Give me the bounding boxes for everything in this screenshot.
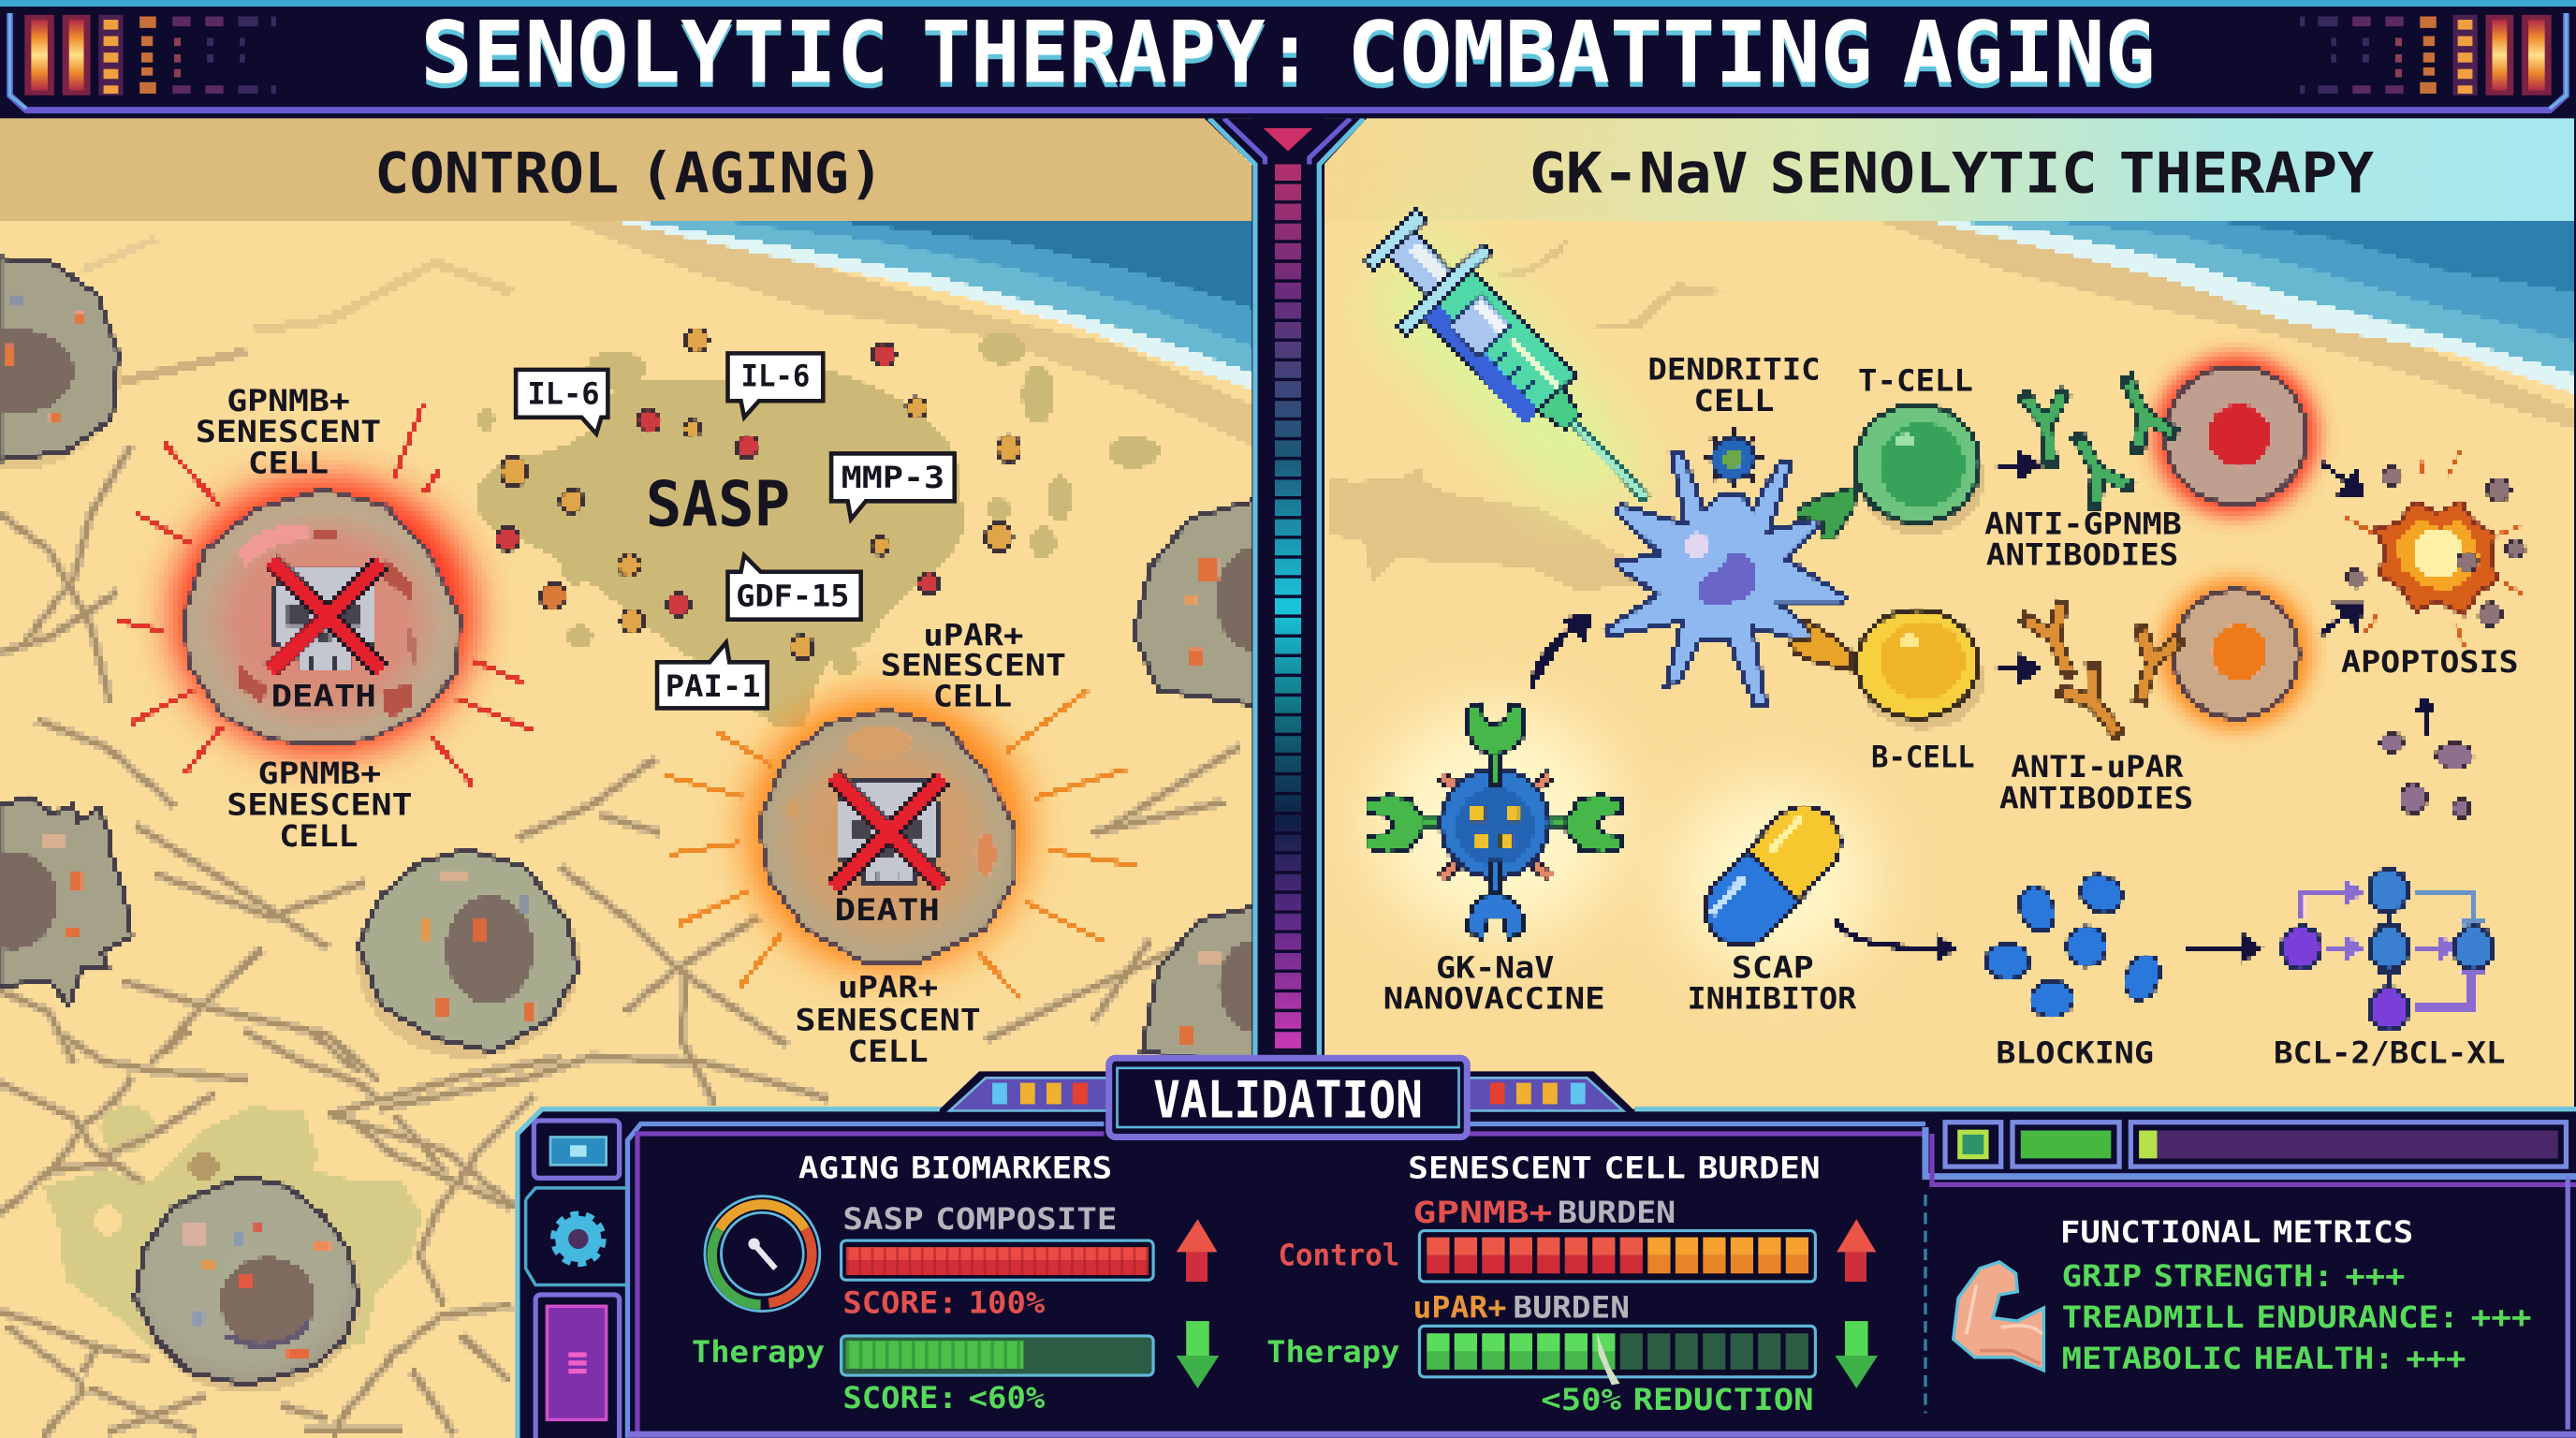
sidebar widget: purple slot [535,1295,620,1438]
value: score 100%: SCORE: 100% [842,1286,1045,1320]
ocean [567,222,1265,452]
icon: flexed arm [1954,1262,2043,1371]
heading: functional metrics: FUNCTIONAL METRICS [2060,1216,2413,1250]
callout: GDF-15 [728,555,861,620]
icon: pink triangle marker [1264,128,1312,151]
label: anti-uPAR antibodies: ANTI-uPAR [2011,751,2185,785]
icon: GK-NaV nanovaccine [1367,703,1623,942]
label: T-cell: T-CELL [1858,365,1973,399]
callout: MMP-3 [831,453,955,520]
label: BCL-2/BCL-XL: BCL-2/BCL-XL [2274,1037,2506,1071]
validation tab: VALIDATION [1153,1070,1423,1129]
panel: GK-NaV senolytic therapy [1314,115,2576,1134]
label: blocking: BLOCKING [1996,1037,2154,1071]
icon: arrow down green [1177,1321,1219,1388]
label: dendritic cell [1647,353,1821,418]
label: uPAR+ burden: uPAR+ [1412,1292,1506,1326]
label: lower uPAR+ senescent cell: uPAR+ [838,971,938,1005]
background cell: lower left [135,1177,361,1393]
background cell: lower right [1142,903,1284,1068]
spine gradient bar [1275,161,1301,1051]
label: top uPAR+ senescent cell [881,620,1066,714]
sand background [0,115,1265,1438]
label: top uPAR+ senescent cell: uPAR+ [923,620,1023,653]
title: THERAPY: [922,3,1314,103]
control scene artwork [0,115,1298,1438]
callout: PAI-1 [657,642,768,708]
label: GPNMB+ burden [1412,1196,1676,1230]
dashboard frame [518,1109,2576,1438]
label: death GPNMB: DEATH [271,681,376,714]
label: top GPNMB+ senescent cell: CELL [248,447,329,480]
arrow: orange cell to apoptosis [2320,605,2363,636]
arrow: nanovaccine to dendritic cell [1531,616,1590,690]
panel: validation dashboard [518,1058,2576,1438]
tab: right indicator lights [1462,1071,1633,1121]
heading: therapy: GK-NaV SENOLYTIC THERAPY [1530,141,2374,206]
senescent cell: GPNMB+ with death mark [118,403,534,785]
status widgets top right [1945,1123,2566,1167]
title strip: control [0,115,1265,222]
icon: T-cell [1797,404,1984,539]
icon: arrow down green burden [1835,1321,1878,1388]
label: SASP: SASP [646,468,790,541]
label: lower GPNMB+ senescent cell: GPNMB+ [258,757,381,791]
callout: IL-6 left: IL-6 [527,378,600,412]
label: top uPAR+ senescent cell: SENESCENT [881,649,1066,682]
tissue fibres [0,446,1249,1436]
icon: orange target cell [2160,579,2311,729]
value: score under 60%: SCORE: <60% [842,1382,1045,1416]
title strip: therapy [1314,115,2576,222]
heading: aging biomarkers: AGING BIOMARKERS [798,1152,1112,1185]
soft glows behind items [1364,213,1876,975]
title [420,3,2156,103]
icon: anti-uPAR antibodies [2027,607,2176,742]
icon: arrow up red [1177,1219,1218,1282]
label: apoptosis: APOPTOSIS [2341,646,2519,680]
icon: BCL-2/BCL-XL pathway network [2282,869,2494,1030]
metric list [2062,1260,2532,1376]
validation tab [1109,1058,1467,1137]
bar: SASP therapy under 60% [842,1336,1153,1375]
label: lower uPAR+ senescent cell: CELL [848,1035,929,1069]
panel: control (aging) [0,115,1298,1438]
sidebar widget: blue window [534,1121,620,1178]
arrow: inhibitor to blocking [1834,917,1958,962]
icon: syringe [1348,193,1689,540]
label: SCAP inhibitor: INHIBITOR [1687,983,1857,1017]
central divider column [1204,118,1367,1117]
label: B-cell: B-CELL [1871,741,1975,775]
section: functional metrics [1954,1216,2532,1376]
ocean right [1880,222,2576,431]
label: anti-uPAR antibodies [1999,751,2193,816]
icon: apoptosis explosion [2346,452,2525,649]
title: AGING [1902,3,2156,103]
section: senescent cell burden [1266,1152,1878,1417]
icon: presented nanovaccine on dendritic cell [1702,427,1764,490]
green stain behind lower cell [43,1106,422,1388]
stain marks [95,1152,218,1236]
background cell: top left [0,258,122,470]
background cell: right edge [1134,498,1298,707]
arrow: B-cell to antibodies [1996,657,2039,681]
LED decoration left [24,15,276,95]
icon: blocking molecules [1986,868,2166,1017]
label: anti-GPNMB antibodies: ANTIBODIES [1986,539,2178,573]
label: therapy left: Therapy [692,1336,825,1370]
icon: dendritic cell [1605,452,1845,705]
label: GK-NaV nanovaccine: GK-NaV [1436,951,1554,985]
therapy text labels [1383,141,2519,1071]
label: dendritic cell: CELL [1694,385,1775,418]
sand background right [1314,115,2576,1134]
senescent cell: uPAR+ with death mark [666,690,1137,1001]
label: lower uPAR+ senescent cell: SENESCENT [795,1004,981,1037]
LED decoration right [2300,15,2552,95]
background cell: centre [357,849,580,1058]
label: SCAP inhibitor [1687,951,1857,1017]
icon: arrow up red burden [1837,1219,1876,1282]
label: death uPAR: DEATH [835,894,940,928]
SASP particles [496,329,1020,659]
bar: SASP control 100% [842,1240,1153,1280]
label: GPNMB+ burden: BURDEN [1558,1196,1676,1230]
label: uPAR+ burden [1412,1292,1630,1326]
icon: gear [526,1188,627,1284]
label: anti-uPAR antibodies: ANTIBODIES [1999,783,2193,816]
label: top uPAR+ senescent cell: CELL [933,681,1012,714]
title: SENOLYTIC [420,3,889,103]
tab: left indicator lights [940,1071,1110,1121]
label: anti-GPNMB antibodies: ANTI-GPNMB [1984,507,2182,541]
label: uPAR+ burden: BURDEN [1513,1292,1630,1326]
label: lower GPNMB+ senescent cell: SENESCENT [227,789,413,823]
section: aging biomarkers [692,1152,1219,1416]
label: GPNMB+ burden: GPNMB+ [1412,1196,1553,1230]
value: under 50% reduction: <50% REDUCTION [1541,1384,1814,1417]
metric list: TREADMILL ENDURANCE: +++ [2062,1301,2532,1335]
arrow: T-cell to antibodies [1996,453,2039,477]
label: top GPNMB+ senescent cell: GPNMB+ [227,385,350,418]
arrow: blocking to BCL-2 [2185,936,2259,960]
header banner [0,0,2576,118]
label: GK-NaV nanovaccine [1383,951,1605,1017]
icon: SCAP inhibitor capsule [1690,791,1855,961]
callout: IL-6 right: IL-6 [741,360,810,393]
label: dendritic cell: DENDRITIC [1647,353,1821,387]
arrow: red cell to apoptosis [2320,462,2363,496]
callout: IL-6 left [516,370,607,433]
label: control: Control [1278,1239,1399,1272]
icon: B-cell [1791,609,1984,729]
dune shadows [1327,237,1741,592]
label: lower GPNMB+ senescent cell: CELL [279,820,359,854]
bar: GPNMB+ burden segments [1419,1231,1815,1282]
background cell: spiky left [0,797,131,1005]
label: GK-NaV nanovaccine: NANOVACCINE [1383,983,1605,1017]
bar: uPAR+ burden segments [1419,1326,1815,1386]
metric list: METABOLIC HEALTH: +++ [2062,1343,2466,1376]
label: lower GPNMB+ senescent cell [227,757,413,854]
metric list: GRIP STRENGTH: +++ [2062,1260,2405,1294]
callout: MMP-3: MMP-3 [842,462,944,495]
icon: gauge [705,1196,820,1312]
dune marks [82,238,513,381]
label: therapy right: Therapy [1266,1336,1399,1370]
heading: senescent cell burden: SENESCENT CELL BURDEN [1408,1152,1821,1185]
label: SCAP inhibitor: SCAP [1732,951,1814,985]
label: top GPNMB+ senescent cell [196,385,381,480]
callout: IL-6 right [728,353,823,418]
callout: PAI-1: PAI-1 [666,670,761,704]
label: top GPNMB+ senescent cell: SENESCENT [196,416,381,449]
SASP cloud [476,332,1160,728]
control text labels [196,141,1066,1069]
label: SASP composite: SASP COMPOSITE [842,1203,1117,1237]
heading: control: CONTROL (AGING) [374,141,884,206]
label: lower uPAR+ senescent cell [795,971,981,1069]
icon: red target cell [2154,355,2318,516]
therapy scene artwork [1314,115,2576,1134]
title: COMBATTING [1347,3,1873,103]
icon: anti-GPNMB antibodies [2027,375,2171,503]
icon: debris and arrow up [2380,698,2472,818]
callout: GDF-15: GDF-15 [736,580,849,614]
label: anti-GPNMB antibodies [1984,507,2182,573]
